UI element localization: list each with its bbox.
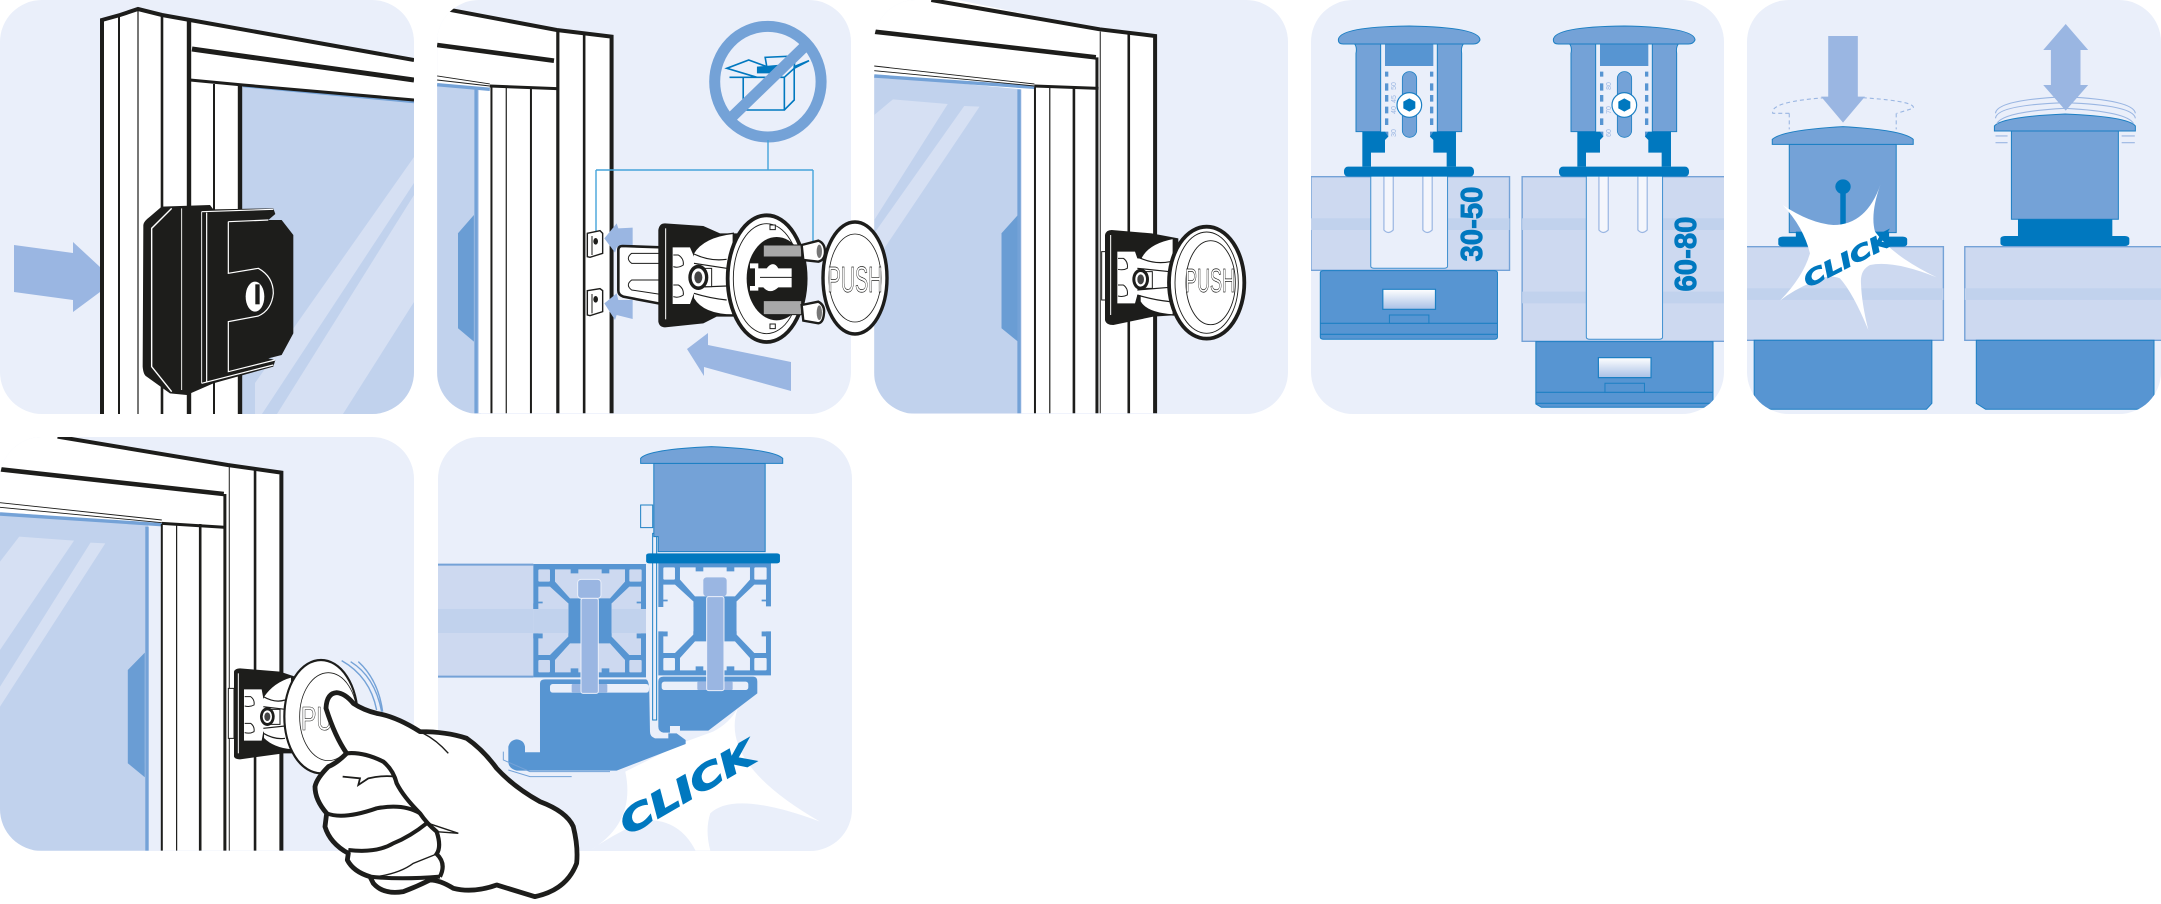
panel 1: lock on frame: [0, 0, 414, 414]
callout lines from icon: [596, 140, 813, 242]
hand pressing button: [315, 693, 577, 897]
panel 3: assembled lock: [871, 0, 1288, 414]
label: PUSH: PUSH: [1185, 262, 1235, 299]
panel 2 push button overlapping panel 3: PUSH: [828, 259, 882, 300]
motion arcs: [342, 661, 383, 712]
knob top view 30-50: [1338, 26, 1480, 177]
latch bracket right: [658, 677, 757, 733]
bolts: [572, 577, 733, 693]
panel 5: click and release: [1745, 0, 2161, 414]
scale numbers: 50: [1391, 82, 1398, 90]
scale numbers: 45: [1391, 95, 1398, 103]
scale numbers: 60: [1606, 129, 1613, 137]
icon: no boxes: [715, 26, 821, 137]
thin bar: [653, 533, 657, 720]
panel 6: pressing the button: [0, 428, 414, 851]
scale numbers: 80: [1606, 82, 1613, 90]
panel 4: adjustment ranges: [1311, 0, 1742, 414]
label: 60-80: 60-80: [1668, 216, 1703, 292]
label: 30-50: 30-50: [1454, 186, 1489, 262]
rail behind profile: [437, 564, 533, 677]
knob side view: [641, 447, 783, 563]
aluminium profile left: [533, 564, 646, 677]
scale numbers: 70: [1606, 106, 1613, 114]
small arrows to tabs: [604, 223, 633, 320]
panel 2 push button overlapping panel 3: [823, 222, 887, 334]
lock mechanism exploded: [587, 215, 825, 342]
lock with push button: [1102, 227, 1244, 339]
arrow: up and down: [2043, 24, 2088, 111]
knob top view 60-80: [1553, 26, 1695, 177]
right assembly released: [1965, 97, 2161, 409]
scale numbers: 30: [1391, 129, 1398, 137]
rail and block 30-50: [1311, 175, 1510, 339]
panel 7: cross-section with click: [437, 437, 852, 851]
click star: [1780, 184, 1937, 330]
label: PUSH partly hidden: PU: [301, 700, 333, 737]
aluminium profile right: [658, 562, 771, 675]
arrow: push toward frame: [14, 242, 100, 312]
tabs: [587, 231, 603, 316]
scale numbers: 40: [1391, 106, 1398, 114]
lock with button pressed: [228, 660, 358, 773]
scale numbers: [1391, 82, 1613, 137]
arrow: press down: [1821, 36, 1865, 123]
arrow: insert parts: [687, 333, 791, 391]
label: CLICK: CLICK: [1800, 226, 1898, 292]
lock body: [143, 205, 293, 395]
latch bracket left: [508, 679, 686, 771]
panel 2: parts inserted in the frame: [437, 0, 851, 414]
rail and block 60-80: [1522, 175, 1742, 407]
left assembly pushed in: [1745, 97, 1943, 409]
label: CLICK large: CLICK: [613, 732, 765, 842]
click star: [590, 708, 820, 851]
